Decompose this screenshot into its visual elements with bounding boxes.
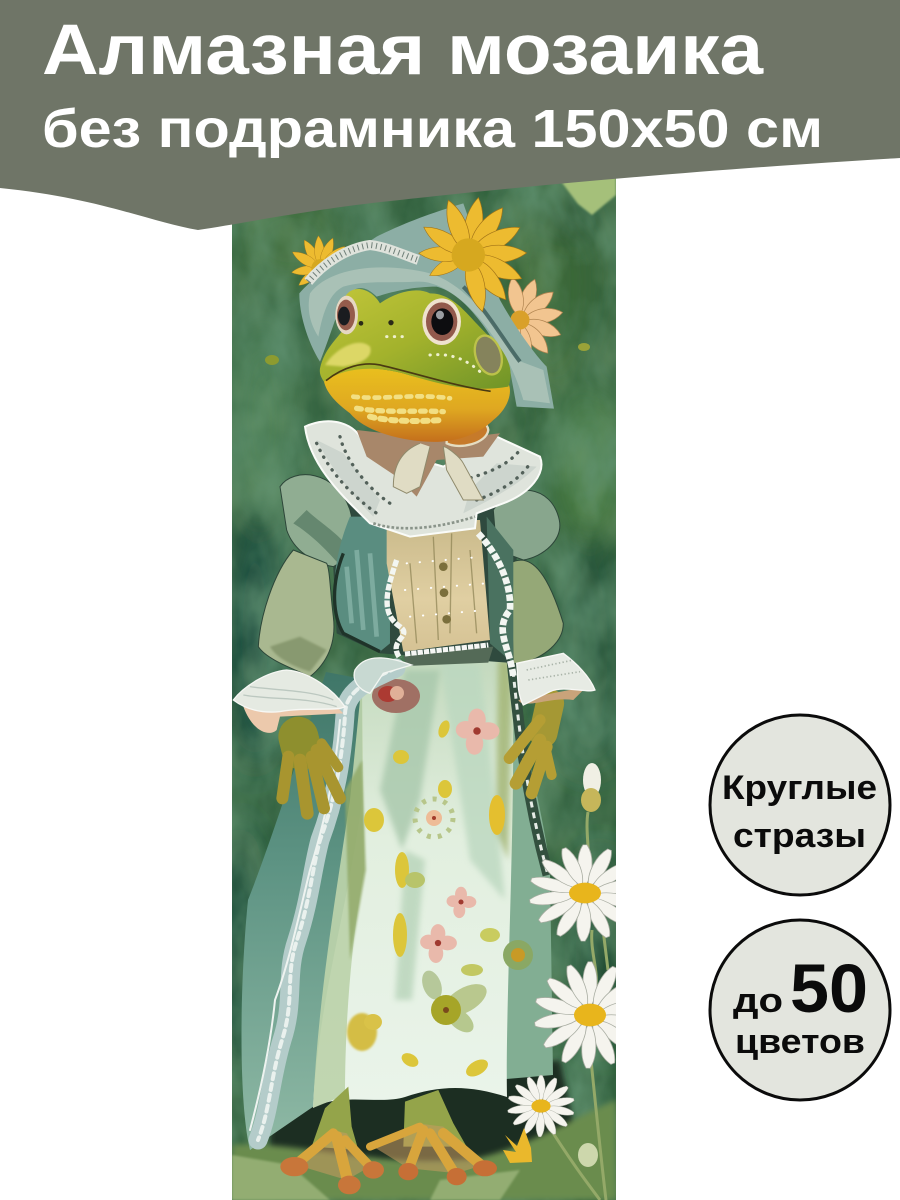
flower: small yellow left xyxy=(279,224,365,310)
bonnet, head and collar xyxy=(279,189,576,537)
bonnet xyxy=(299,203,554,409)
bonnet brim shading xyxy=(309,267,550,403)
wildflower stems xyxy=(548,812,608,1200)
left jacket teal xyxy=(334,517,390,652)
waist band xyxy=(403,647,493,666)
skirt soft folds xyxy=(380,660,512,1000)
daisy lower xyxy=(507,1075,575,1137)
nostrils xyxy=(359,320,394,326)
skirt flower green on coat xyxy=(503,940,533,970)
right foot toes xyxy=(370,1127,485,1177)
right jacket panel xyxy=(487,517,513,663)
right upper sleeve puff xyxy=(493,490,560,560)
right lace ruffle along coat xyxy=(512,660,548,875)
skirt flower red xyxy=(372,679,420,713)
ribbon bow xyxy=(393,443,483,500)
skirt sheer left panel xyxy=(313,680,364,1108)
bodice speckles xyxy=(405,557,487,617)
flower: peach xyxy=(479,270,576,376)
bonnet lace xyxy=(308,245,418,282)
skirt flower olive large xyxy=(422,970,487,1032)
jaw scales xyxy=(353,396,450,421)
feet xyxy=(280,1087,497,1194)
title line 2: без подрамника 150х50 см xyxy=(42,99,823,159)
flower bud xyxy=(581,763,601,812)
bodice xyxy=(387,520,490,652)
badge text line 2: стразы xyxy=(733,817,866,855)
banner: top title band xyxy=(0,0,900,230)
throat orange xyxy=(447,420,488,446)
left lace ruffle along coat xyxy=(250,668,396,1140)
jacket stripes xyxy=(347,550,377,637)
right lower sleeve xyxy=(510,560,563,663)
skirt xyxy=(313,658,533,1108)
painting: frog lady in a bonnet and dress xyxy=(225,170,646,1200)
left eye xyxy=(335,296,358,334)
dark shadow under skirt xyxy=(270,1060,575,1165)
hanging bud xyxy=(578,1143,598,1167)
collar eyelets xyxy=(317,437,530,513)
coat left panel xyxy=(242,672,368,1150)
grassy ground xyxy=(232,1100,616,1200)
left foot toes xyxy=(293,1133,372,1183)
right foot webbing xyxy=(376,1123,474,1172)
waist sheer bow xyxy=(354,658,412,693)
left cuff xyxy=(233,670,345,733)
frog lower jaw xyxy=(324,368,510,442)
coat right panel xyxy=(506,721,553,1079)
upper body xyxy=(233,475,595,813)
right eye xyxy=(422,298,461,345)
skin speckles xyxy=(387,337,480,372)
left hand xyxy=(282,737,340,813)
badge word do: до xyxy=(733,982,783,1020)
badge: round rhinestones xyxy=(710,715,890,895)
jacket dark outline xyxy=(335,553,380,652)
bodice buttons xyxy=(439,562,451,624)
skirt flower yellow xyxy=(347,1013,382,1051)
collar ruffle shading xyxy=(317,440,537,517)
left foot webbing xyxy=(306,1132,364,1178)
skirt flower pink xyxy=(456,708,500,755)
frog upper head xyxy=(320,289,511,389)
tympanum xyxy=(470,332,507,378)
lace collar xyxy=(305,421,541,537)
left puff shade xyxy=(293,510,345,562)
badge: up to 50 colours xyxy=(710,920,890,1100)
daisy middle xyxy=(534,961,616,1069)
painting background wash xyxy=(225,170,630,1200)
right foot toe pads xyxy=(398,1160,497,1185)
left bodice ruffle xyxy=(387,560,404,658)
neck ruffle xyxy=(357,430,500,497)
yellow leaves on skirt xyxy=(364,719,505,1080)
legs xyxy=(312,1087,467,1150)
badge text line 1: Круглые xyxy=(722,769,877,807)
left sleeve shading xyxy=(270,637,327,672)
small yellow flower xyxy=(503,1128,532,1163)
right cuff xyxy=(517,653,595,705)
left upper sleeve puff xyxy=(280,475,353,567)
bodice pleats xyxy=(410,533,477,643)
badge number 50: 50 xyxy=(790,950,868,1027)
snout highlight xyxy=(325,343,371,367)
daisy upper xyxy=(529,844,616,942)
right bodice ruffle xyxy=(478,533,513,677)
waist lace xyxy=(405,645,488,654)
mouth line xyxy=(326,364,491,391)
right hand xyxy=(509,703,552,793)
skirt flower pink lower xyxy=(447,887,476,918)
bonnet dark edge xyxy=(463,287,520,362)
torso base xyxy=(330,503,517,663)
left lower sleeve xyxy=(258,550,334,677)
ground highlights xyxy=(232,1155,520,1200)
bonnet lace underlay xyxy=(308,245,418,282)
skirt flower peach with dots xyxy=(415,799,453,837)
title line 1: Алмазная мозаика xyxy=(42,11,764,90)
sheer olive stripe xyxy=(345,760,366,960)
left foot toe pads xyxy=(280,1157,384,1194)
badge word colours: цветов xyxy=(735,1023,865,1061)
skirt flower pink crimson xyxy=(420,924,457,963)
collar scalloped edge xyxy=(373,517,475,528)
flower: large yellow xyxy=(408,189,536,321)
